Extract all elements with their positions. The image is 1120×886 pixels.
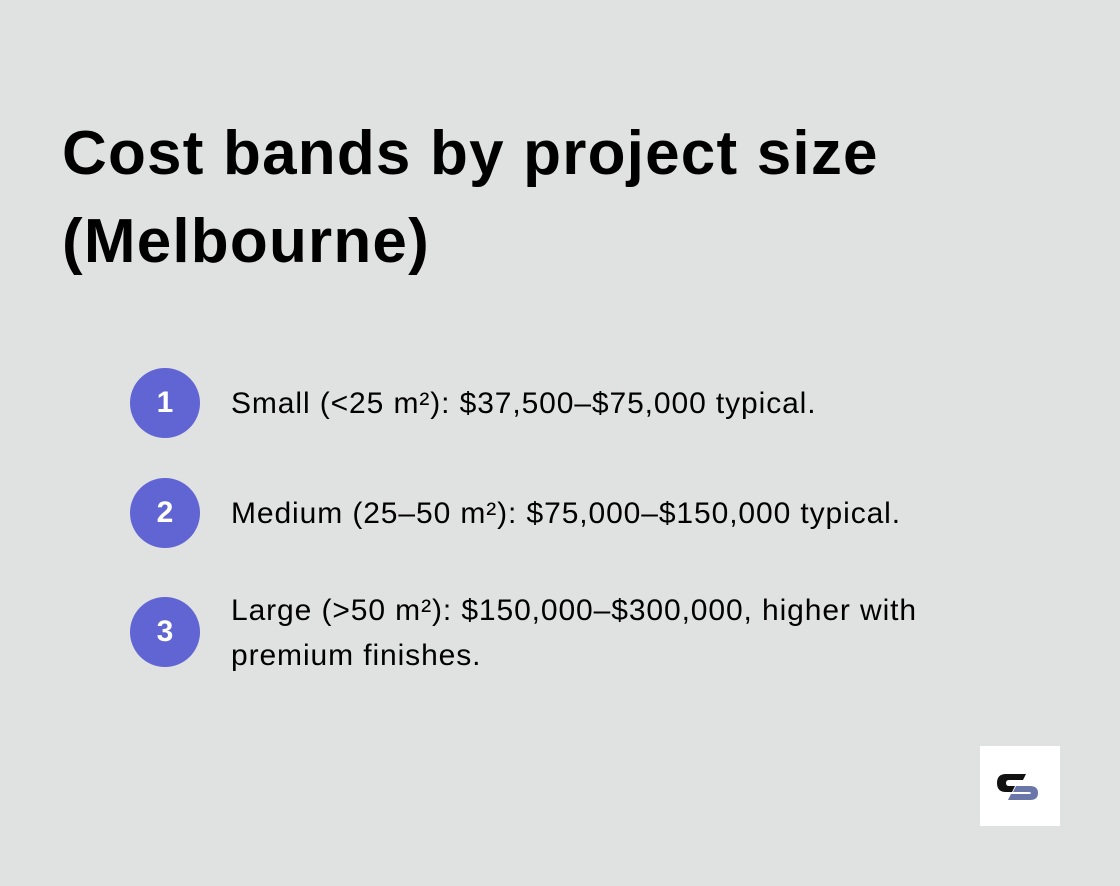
text 3: Large (>50 m²): $150,000–$300,000, higher with premium finishes. xyxy=(231,594,917,672)
text 1: Small (<25 m²): $37,500–$75,000 typical. xyxy=(231,387,816,420)
title: (Melbourne) xyxy=(62,207,430,276)
text 2: Medium (25–50 m²): $75,000–$150,000 typical. xyxy=(231,497,901,530)
title xyxy=(62,119,879,276)
item 2 xyxy=(130,478,901,548)
badge 1 xyxy=(130,368,200,438)
title: Cost bands by project size xyxy=(62,119,879,188)
badge 3 xyxy=(130,597,200,667)
logo xyxy=(980,746,1060,826)
badge 2 xyxy=(130,478,200,548)
item 1 xyxy=(130,368,816,438)
item 3 xyxy=(130,594,917,672)
badge 3: 3 xyxy=(157,615,173,648)
badge 1: 1 xyxy=(157,386,173,419)
badge 2: 2 xyxy=(157,496,173,529)
